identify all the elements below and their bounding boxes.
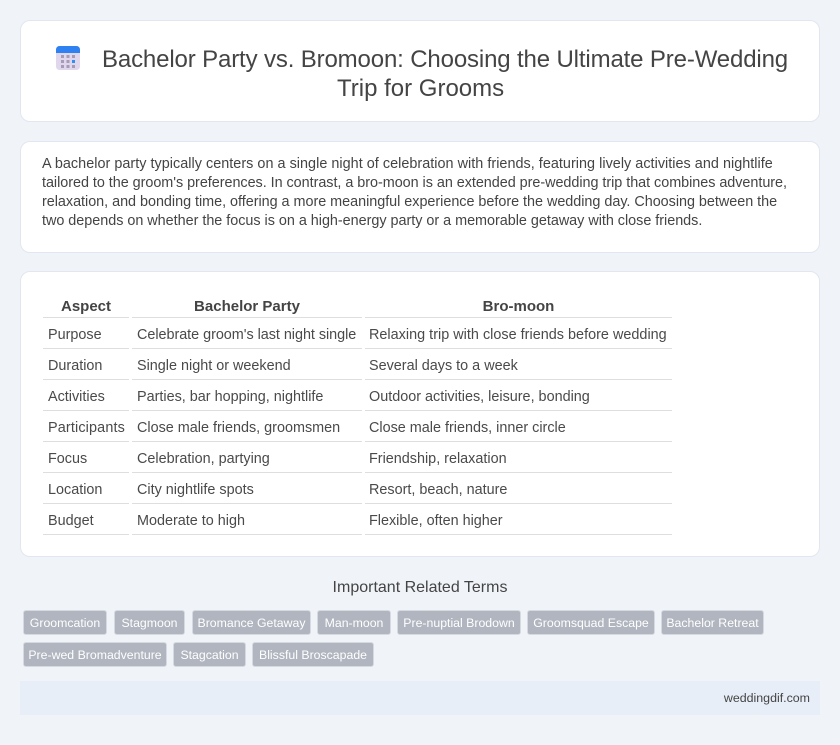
related terms chips: Man-moon	[325, 616, 383, 630]
table rows: Relaxing trip with close friends before wedding	[369, 327, 667, 343]
text block: introduction: tailored to the groom's preferences. In contrast, a bro-moon is an extended pre-wedding trip that combines adventure,	[42, 175, 787, 191]
table header	[61, 298, 554, 315]
table rows: Flexible, often higher	[369, 513, 503, 529]
panel: introduction	[20, 141, 820, 253]
panel: comparison table	[20, 271, 820, 557]
table rows	[48, 327, 667, 529]
table rows: Location	[48, 482, 102, 498]
footer source text: weddingdif.com	[724, 691, 810, 705]
related terms chips: Blissful Broscapade	[259, 648, 367, 662]
icon: calendar	[56, 46, 80, 70]
related terms chips: Pre-nuptial Brodown	[403, 616, 515, 630]
table header: Aspect	[61, 298, 111, 315]
related terms chips: Groomcation	[30, 616, 100, 630]
table rows: Activities	[48, 389, 105, 405]
table rows: Close male friends, groomsmen	[137, 420, 340, 436]
table rows: Close male friends, inner circle	[369, 420, 566, 436]
table rows: Participants	[48, 420, 125, 436]
table rows: Purpose	[48, 327, 102, 343]
table rows: Budget	[48, 513, 94, 529]
title	[102, 46, 788, 102]
table rows: City nightlife spots	[137, 482, 254, 498]
text block: introduction: relaxation, and bonding time, offering a more meaningful experience before the wedding day. Choosing between the	[42, 194, 777, 210]
table rows: Outdoor activities, leisure, bonding	[369, 389, 590, 405]
related terms chips: Pre-wed Bromadventure	[28, 648, 162, 662]
row lines	[43, 317, 672, 535]
related terms chips: Groomsquad Escape	[533, 616, 649, 630]
table rows: Resort, beach, nature	[369, 482, 507, 498]
table rows: Celebrate groom's last night single	[137, 327, 356, 343]
text block: introduction	[42, 156, 787, 229]
panel: header	[20, 20, 820, 122]
table rows: Moderate to high	[137, 513, 245, 529]
text block: introduction: two depends on whether the focus is on a high-energy party or a memorable getaway with close friends.	[42, 213, 702, 229]
related terms chips: Bromance Getaway	[198, 616, 306, 630]
footer	[20, 681, 820, 715]
table rows: Celebration, partying	[137, 451, 270, 467]
heading: important related terms: Important Related Terms	[333, 579, 507, 596]
related terms chips: Stagmoon	[121, 616, 178, 630]
table rows: Several days to a week	[369, 358, 518, 374]
title: Bachelor Party vs. Bromoon: Choosing the Ultimate Pre-Wedding	[102, 46, 788, 73]
table header: Bachelor Party	[194, 298, 300, 315]
text block: introduction: A bachelor party typically centers on a single night of celebration with friends, featuring lively activities and nightlife	[42, 156, 773, 172]
table rows: Focus	[48, 451, 87, 467]
table rows: Friendship, relaxation	[369, 451, 507, 467]
table rows: Single night or weekend	[137, 358, 291, 374]
related terms chips	[23, 610, 764, 667]
title: Trip for Grooms	[337, 75, 504, 102]
table rows: Duration	[48, 358, 102, 374]
related terms chips: Stagcation	[180, 648, 239, 662]
table rows: Parties, bar hopping, nightlife	[137, 389, 323, 405]
related terms chips: Bachelor Retreat	[666, 616, 759, 630]
table header: Bro-moon	[483, 298, 554, 315]
